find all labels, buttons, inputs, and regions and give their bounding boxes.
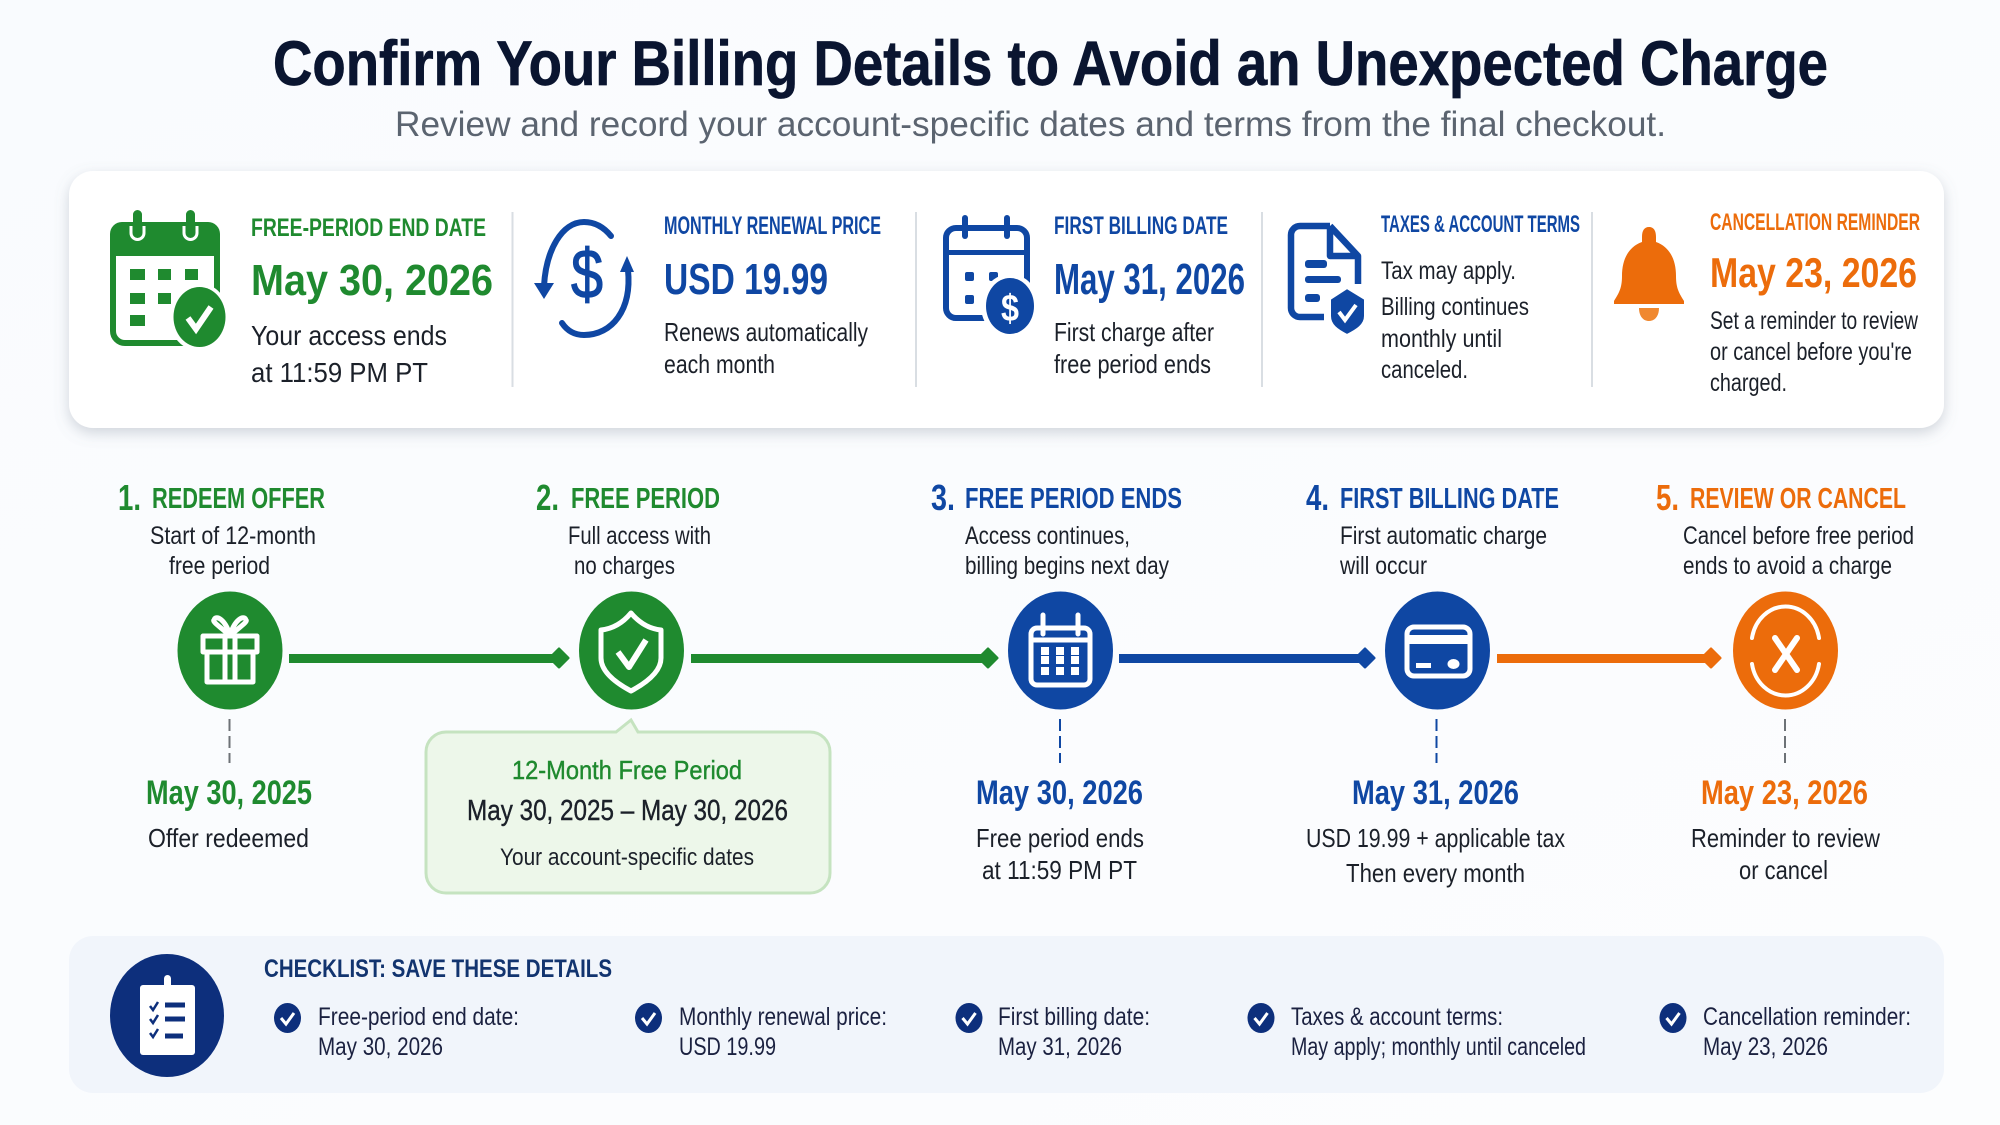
step 2: free period <box>536 477 720 710</box>
checklist item: cancellation reminder <box>1660 1003 1911 1061</box>
step 5: review or cancel: 5. <box>1656 477 1679 518</box>
card 4 text: taxes and account terms: Tax may apply. <box>1381 257 1516 285</box>
step 1: redeem offer <box>118 477 325 853</box>
step 3: free period ends: May 30, 2026 <box>976 774 1143 812</box>
step 5: review or cancel: Reminder to review <box>1691 823 1880 853</box>
callout: 12-month free period <box>426 720 830 893</box>
card 2 text: monthly renewal price: each month <box>664 349 775 379</box>
card 4 text: taxes and account terms: Billing continues <box>1381 293 1529 321</box>
subtitle: Review and record your account-specific dates and terms from the final checkout. <box>395 105 1666 144</box>
icon: calendar with dollar badge <box>946 215 1039 338</box>
step 1: redeem offer: Start of 12-month <box>150 522 316 550</box>
checklist item: free-period end date <box>274 1003 519 1061</box>
card 5 text: cancellation reminder <box>1710 209 1920 397</box>
card 2 text: monthly renewal price: Renews automatically <box>664 317 868 347</box>
card 3 text: first billing date: May 31, 2026 <box>1054 255 1245 304</box>
step 5: review or cancel: or cancel <box>1739 855 1828 885</box>
checklist item: free-period end date: Free-period end date: <box>318 1003 519 1031</box>
card 1 text: free-period end date: Your access ends <box>251 320 447 351</box>
step 1: redeem offer: REDEEM OFFER <box>152 483 325 515</box>
checklist item: first billing date <box>956 1003 1150 1061</box>
card 5 text: cancellation reminder: charged. <box>1710 369 1787 397</box>
card 4 text: taxes and account terms: TAXES & ACCOUNT TERMS <box>1381 211 1580 238</box>
icon: renewal dollar arrows: $ <box>571 235 603 313</box>
card 3 text: first billing date: FIRST BILLING DATE <box>1054 212 1228 240</box>
checklist item: monthly renewal price: USD 19.99 <box>679 1033 776 1061</box>
icon: gift <box>203 618 257 682</box>
card 3 text: first billing date <box>1054 212 1245 379</box>
step 1: redeem offer: Offer redeemed <box>148 823 309 853</box>
checklist item: free-period end date: May 30, 2026 <box>318 1033 443 1061</box>
card 1 text: free-period end date: FREE-PERIOD END DATE <box>251 214 486 242</box>
step 3: free period ends: 3. <box>931 477 955 518</box>
checklist heading: CHECKLIST: SAVE THESE DETAILS <box>264 955 612 983</box>
icon: cancel x <box>1752 606 1819 696</box>
step 2: free period: no charges <box>574 552 675 580</box>
step 3: free period ends: at 11:59 PM PT <box>982 855 1137 885</box>
card 3 text: first billing date: First charge after <box>1054 317 1214 347</box>
card 5 text: cancellation reminder: Set a reminder to review <box>1710 307 1919 335</box>
step 1: redeem offer: May 30, 2025 <box>146 774 312 812</box>
icon: bell <box>1614 227 1684 321</box>
step 4: first billing date: First automatic charge <box>1340 522 1547 550</box>
card 1 text: free-period end date: at 11:59 PM PT <box>251 357 428 388</box>
card 5 text: cancellation reminder: or cancel before you're <box>1710 338 1912 366</box>
checklist item: taxes and account terms: Taxes & account terms: <box>1291 1003 1503 1031</box>
icon: calendar with dollar badge: $ <box>1001 288 1019 330</box>
checklist item: cancellation reminder: May 23, 2026 <box>1703 1033 1828 1061</box>
card 1 text: free-period end date <box>251 214 493 388</box>
icon: renewal dollar arrows <box>534 222 634 335</box>
icon: shield check <box>601 613 661 691</box>
panel: checklist <box>69 936 1944 1093</box>
step 3: free period ends: Access continues, <box>965 522 1130 550</box>
step 2: free period: FREE PERIOD <box>571 483 720 515</box>
callout: 12-month free period: May 30, 2025 – May 30, 2026 <box>467 795 788 827</box>
step 4: first billing date: USD 19.99 + applicable tax <box>1306 823 1565 853</box>
card 3 text: first billing date: free period ends <box>1054 349 1211 379</box>
card 5 text: cancellation reminder: May 23, 2026 <box>1710 249 1917 296</box>
step 1: redeem offer: free period <box>169 552 270 580</box>
card 1 text: free-period end date: May 30, 2026 <box>251 256 493 305</box>
step 4: first billing date: FIRST BILLING DATE <box>1340 483 1559 515</box>
card 4 text: taxes and account terms <box>1381 211 1580 384</box>
step 2: free period: Full access with <box>568 522 711 550</box>
checklist item: taxes and account terms: May apply; monthly until canceled <box>1291 1033 1586 1061</box>
step 3: free period ends <box>931 477 1182 885</box>
step 4: first billing date: Then every month <box>1346 858 1525 888</box>
step 4: first billing date: May 31, 2026 <box>1352 774 1519 812</box>
step 1: redeem offer: 1. <box>118 477 141 518</box>
step 5: review or cancel <box>1656 477 1914 885</box>
checklist item: cancellation reminder: Cancellation reminder: <box>1703 1003 1911 1031</box>
card 4 text: taxes and account terms: monthly until <box>1381 325 1502 353</box>
step 5: review or cancel: REVIEW OR CANCEL <box>1690 483 1906 515</box>
icon: calendar <box>1031 615 1090 685</box>
checklist item: monthly renewal price <box>635 1003 887 1061</box>
checklist item: monthly renewal price: Monthly renewal price: <box>679 1003 887 1031</box>
checklist item: taxes and account terms <box>1248 1003 1586 1061</box>
callout: 12-month free period: Your account-specific dates <box>500 844 754 871</box>
callout: 12-month free period: 12-Month Free Period <box>512 755 742 785</box>
step 2: free period: 2. <box>536 477 559 518</box>
card 2 text: monthly renewal price: MONTHLY RENEWAL PRICE <box>664 212 881 240</box>
step 3: free period ends: Free period ends <box>976 823 1144 853</box>
icon: clipboard checklist <box>110 954 224 1077</box>
step 4: first billing date: 4. <box>1306 477 1329 518</box>
panel: key billing details <box>69 171 1944 428</box>
step 4: first billing date: will occur <box>1339 552 1427 580</box>
step 3: free period ends: billing begins next day <box>965 552 1169 580</box>
step 5: review or cancel: May 23, 2026 <box>1701 774 1868 812</box>
card 2 text: monthly renewal price: USD 19.99 <box>664 255 828 304</box>
step 5: review or cancel: Cancel before free period <box>1683 522 1914 550</box>
icon: credit card <box>1407 627 1470 676</box>
card 2 text: monthly renewal price <box>664 212 881 379</box>
checklist item: first billing date: May 31, 2026 <box>998 1033 1122 1061</box>
step 3: free period ends: FREE PERIOD ENDS <box>965 483 1182 515</box>
card 4 text: taxes and account terms: canceled. <box>1381 356 1468 384</box>
checklist item: first billing date: First billing date: <box>998 1003 1150 1031</box>
step 5: review or cancel: ends to avoid a charge <box>1683 552 1892 580</box>
timeline connectors <box>289 649 1720 667</box>
icon: document with shield <box>1291 226 1365 335</box>
step 4: first billing date <box>1306 477 1565 888</box>
icon: green calendar with check <box>110 210 229 351</box>
